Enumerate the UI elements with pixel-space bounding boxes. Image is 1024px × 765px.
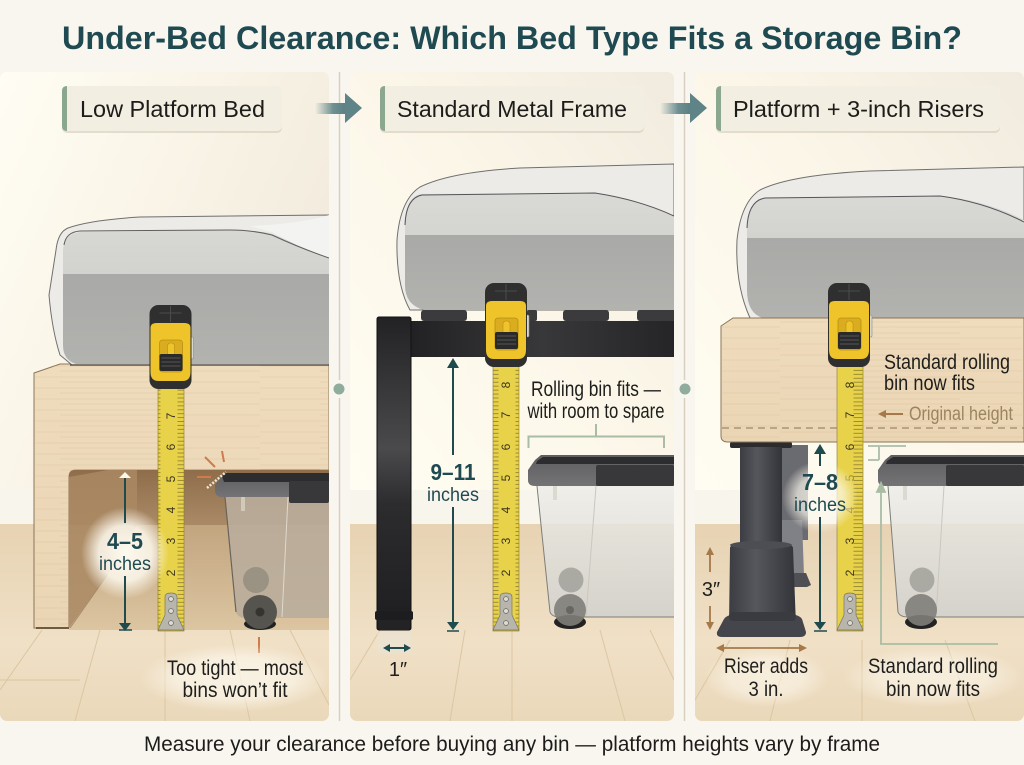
platform bed wood frame: [721, 318, 1024, 442]
dimension: 4-5 inches: 4–5: [107, 528, 143, 554]
tape measure: 6: [843, 443, 857, 450]
dimension: 4-5 inches: inches: [99, 554, 151, 575]
callout: rolling bin fits: Rolling bin fits —: [531, 378, 661, 401]
panel: low platform bed: [0, 72, 330, 721]
tape measure: 5: [843, 474, 857, 481]
title: Under-Bed Clearance: Which Bed Type Fits a Storage Bin?: [62, 20, 962, 56]
tape measure: 8: [499, 381, 513, 388]
callout: riser adds 3 in: Riser adds: [724, 655, 808, 678]
callout: standard rolling bin on frame: [884, 354, 1009, 390]
arrow two: [660, 93, 707, 123]
dimension: 9-11 inches: 9–11: [430, 459, 476, 485]
dimension: leg width 1 inch: [383, 644, 411, 676]
tape measure: 7: [843, 411, 857, 418]
dimension: 9-11 inches: [427, 358, 479, 631]
dimension: 4-5 inches: [81, 472, 169, 631]
callout: riser adds 3 in: [710, 644, 819, 704]
tape measure: 7: [164, 412, 178, 419]
tape measure: 4: [164, 506, 178, 513]
storage bin: now fits: [878, 455, 1024, 629]
tape measure: 2: [843, 569, 857, 576]
gap marker and bin bracket: [868, 446, 998, 644]
tape measure: 5: [164, 475, 178, 482]
front riser: [717, 442, 806, 637]
tape measure: 2: [164, 569, 178, 576]
label: standard metal frame: Standard Metal Frame: [397, 96, 627, 122]
label: original height: [878, 406, 1013, 424]
dimension: 7-8 inches: [782, 444, 858, 631]
callout: too tight: [150, 646, 320, 709]
callout: rolling bin fits: [527, 378, 664, 448]
label: standard metal frame: [380, 86, 644, 133]
panel: platform plus risers: [695, 72, 1024, 721]
tape measure: 6: [164, 443, 178, 450]
callout: standard rolling bin on floor: Standard rolling: [868, 655, 998, 678]
dimension: 7-8 inches: inches: [794, 495, 846, 516]
label: platform plus risers: [716, 86, 1000, 133]
callout: standard rolling bin on floor: [856, 650, 1010, 703]
label: low platform bed: [62, 86, 282, 133]
metal frame slats: [421, 310, 683, 321]
tape measure: 6: [499, 443, 513, 450]
metal frame rail and leg: [375, 317, 674, 653]
tape measure: 7: [499, 411, 513, 418]
callout: standard rolling bin on floor: bin now fits: [886, 678, 980, 701]
tape measure: 8: [843, 381, 857, 388]
storage bin: fits: [528, 455, 674, 629]
tape measure: 4: [843, 506, 857, 513]
tape measure: 5: [499, 474, 513, 481]
dimension: 9-11 inches: inches: [427, 485, 479, 506]
tape measure: 3: [843, 537, 857, 544]
dimension: leg width 1 inch: 1″: [389, 659, 407, 681]
tape measure: 3: [499, 537, 513, 544]
tape measure: 2: [499, 569, 513, 576]
platform bed wood frame: [34, 364, 329, 630]
tape measure: [150, 305, 194, 631]
panel: standard metal frame: [350, 72, 683, 721]
callout: rolling bin fits: with room to spare: [527, 400, 664, 423]
tape measure: [485, 283, 529, 631]
mattress: [737, 167, 1024, 319]
tape measure: 3: [164, 537, 178, 544]
tape measure: [828, 283, 872, 631]
divider two: [680, 72, 690, 721]
impact marks: [197, 451, 259, 653]
dimension: 7-8 inches: 7–8: [802, 469, 838, 495]
label: low platform bed: Low Platform Bed: [80, 96, 265, 122]
mattress: [397, 164, 674, 310]
callout: too tight: bins won’t fit: [182, 679, 288, 702]
tape measure: 4: [499, 506, 513, 513]
rear riser: [782, 445, 811, 587]
arrow one: [315, 93, 362, 123]
mattress: [49, 215, 329, 365]
footer caption: Measure your clearance before buying any bin — platform heights vary by frame: [144, 733, 880, 756]
storage bin: too tight: [215, 473, 329, 630]
callout: riser adds 3 in: 3 in.: [748, 678, 784, 701]
dimension: riser 3 inches: [702, 547, 720, 630]
label: platform plus risers: Platform + 3-inch Risers: [733, 96, 984, 122]
dimension: riser 3 inches: 3″: [702, 579, 720, 601]
divider one: [334, 72, 344, 721]
callout: standard rolling bin on frame: bin now fits: [884, 372, 975, 395]
callout: too tight: Too tight — most: [167, 657, 303, 680]
